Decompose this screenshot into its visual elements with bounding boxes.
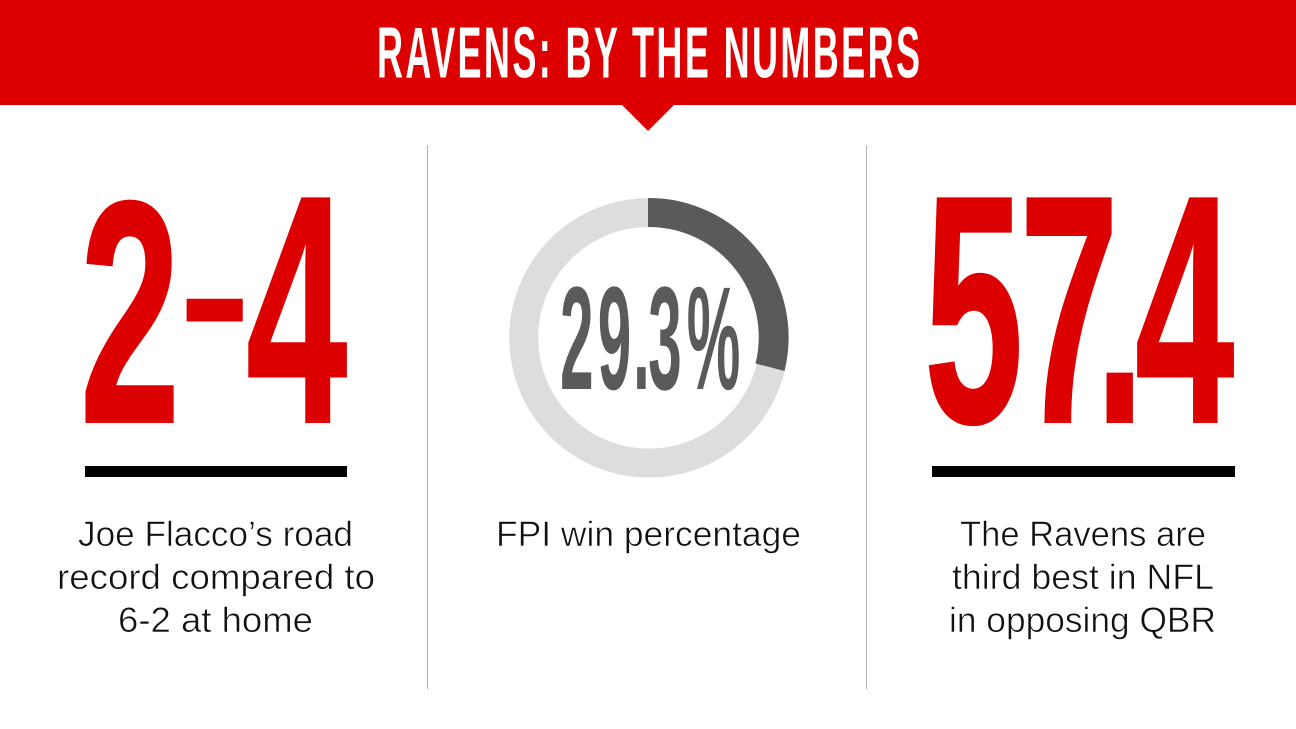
caption: FPI win percentage: FPI win percentage [496, 514, 801, 554]
text block: QBR caption: in opposing QBR [949, 600, 1216, 640]
rule: right [932, 466, 1235, 477]
big number: 57.4: 57.4 [924, 128, 1236, 491]
text block: road record caption: record compared to [57, 557, 375, 597]
panel: road record [57, 128, 375, 640]
text block: road record caption: 6-2 at home [118, 600, 313, 640]
text block: QBR caption: The Ravens are [960, 514, 1206, 554]
panel: opposing QBR [924, 128, 1236, 640]
divider: right [866, 145, 867, 689]
big number: 2-4 [80, 128, 348, 491]
rule: left [85, 466, 347, 477]
panel: FPI win percentage [496, 198, 801, 554]
big number: 2-4: - [178, 187, 252, 400]
title: RAVENS: BY THE NUMBERS [377, 13, 920, 94]
text block: QBR caption: third best in NFL [952, 557, 1214, 597]
big number: 2-4: 2 [80, 134, 180, 490]
text block: road record caption: Joe Flacco’s road [78, 514, 353, 554]
big number: 2-4: 4 [246, 128, 348, 491]
text block: road record caption [57, 514, 375, 640]
donut chart: 29.3% [524, 198, 789, 463]
donut value: 29.3% [560, 256, 740, 420]
divider: left [427, 145, 428, 689]
header banner [0, 0, 1296, 131]
text block: QBR caption [949, 514, 1216, 640]
